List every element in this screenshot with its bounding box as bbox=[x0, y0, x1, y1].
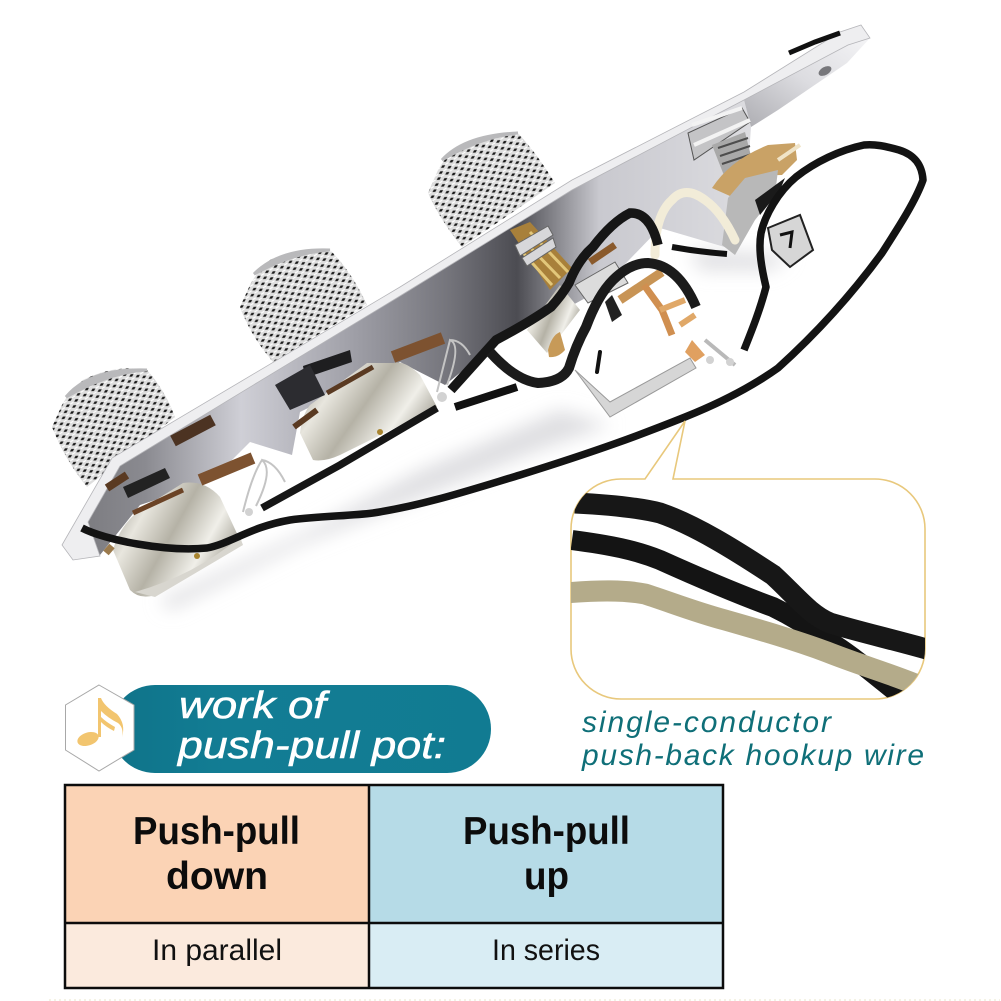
potentiometer 1 bbox=[106, 420, 285, 597]
wire looping to switch lug bbox=[490, 263, 696, 383]
callout: wire close-up bbox=[565, 421, 930, 699]
close-up wire strands bbox=[565, 503, 930, 695]
control knob 3 bbox=[428, 133, 555, 247]
black stub wire with red lead bbox=[455, 362, 525, 407]
comparison table bbox=[65, 785, 723, 988]
cream insulated wire bbox=[655, 192, 735, 255]
icon: music note in hexagon bbox=[66, 685, 134, 771]
table header: push-pull up bbox=[463, 810, 630, 898]
table header: push-pull up: Push-pull bbox=[463, 810, 630, 853]
output jack bbox=[688, 108, 813, 267]
section heading badge bbox=[66, 685, 491, 773]
table cell: in series: In series bbox=[492, 934, 600, 967]
push-pull switch box bbox=[575, 272, 735, 417]
short black wire bbox=[672, 247, 727, 254]
table header: push-pull up: up bbox=[524, 855, 569, 898]
table header: push-pull down: Push-pull bbox=[133, 810, 300, 853]
heading text bbox=[177, 685, 446, 767]
solder joints bbox=[245, 356, 734, 516]
soft shadow under plate bbox=[160, 250, 790, 610]
callout caption: single-conductor bbox=[582, 706, 832, 739]
wire from pot 2 to switch bbox=[451, 213, 658, 390]
control knob 1 bbox=[52, 368, 175, 487]
main hookup wire bbox=[82, 145, 923, 549]
potentiometer 2 bbox=[275, 338, 470, 460]
wire between pot 1 and pot 2 bbox=[262, 408, 437, 508]
control knob 2 bbox=[240, 249, 367, 362]
heading text: work of bbox=[179, 685, 330, 727]
table cell: in parallel: In parallel bbox=[152, 934, 282, 967]
heading pill bbox=[111, 685, 491, 773]
potentiometer 3 with threaded bushing bbox=[510, 222, 628, 357]
callout caption bbox=[581, 706, 924, 772]
table header: push-pull down bbox=[133, 810, 300, 898]
chrome control plate bbox=[62, 25, 870, 560]
table header: push-pull down: down bbox=[166, 855, 268, 898]
callout caption: push-back hookup wire bbox=[581, 739, 924, 772]
heading text: push-pull pot: bbox=[177, 725, 446, 767]
